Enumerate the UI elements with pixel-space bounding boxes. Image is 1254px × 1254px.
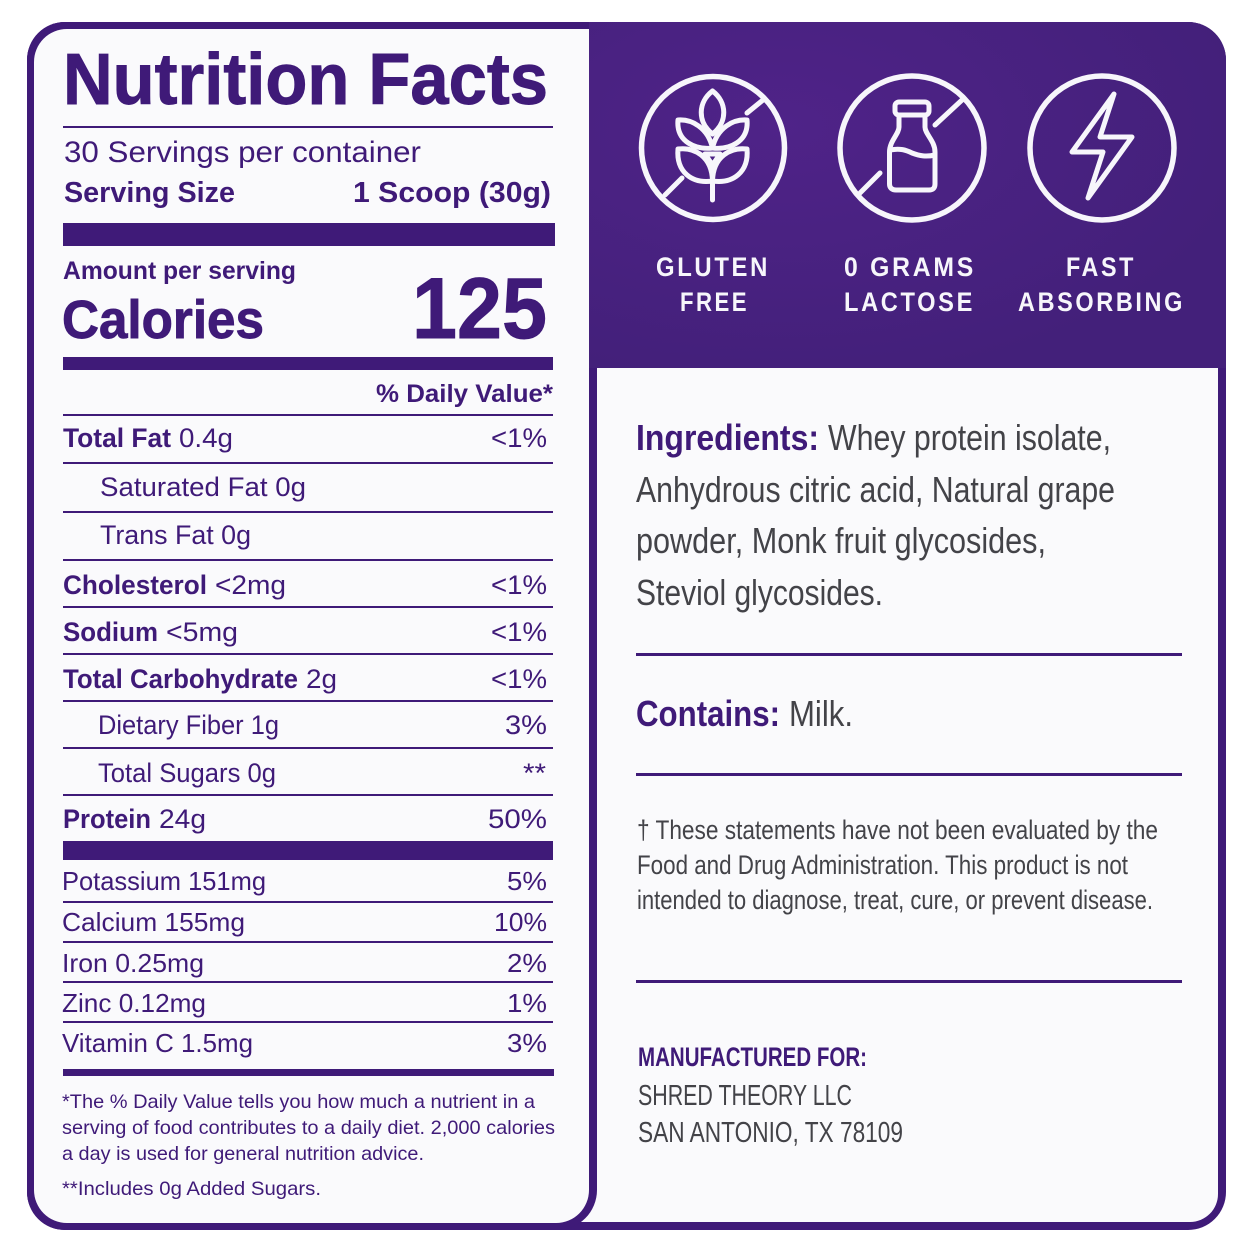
contains: Contains: — [636, 693, 780, 734]
daily value heading: % Daily Value* — [376, 380, 553, 408]
vitamins and minerals: 2% — [507, 948, 547, 978]
label: gluten free: GLUTEN — [656, 252, 770, 282]
nutrient rows: 2g — [306, 664, 337, 694]
nutrient rows: 24g — [159, 804, 206, 834]
nutrient rows: Sodium — [63, 617, 158, 647]
calories: Calories — [62, 290, 264, 350]
nutrient rows: 0.4g — [179, 423, 233, 453]
servings — [64, 136, 551, 209]
nutrient rows: <1% — [491, 617, 547, 647]
vitamins and minerals: Vitamin C 1.5mg — [62, 1028, 253, 1058]
disclaimer: Food and Drug Administration. This product is not — [637, 850, 1128, 880]
nutrient rows: <1% — [491, 570, 547, 600]
vitamins and minerals: Calcium 155mg — [62, 907, 245, 937]
nutrient rows: Protein — [63, 804, 151, 834]
panel: benefits header — [589, 22, 1226, 368]
manufacturer: SHRED THEORY LLC — [638, 1080, 852, 1112]
icon: lightning bolt — [1030, 76, 1174, 220]
manufacturer — [638, 1042, 903, 1149]
disclaimer: † These statements have not been evaluated by the — [637, 815, 1158, 845]
label: 0 grams lactose: 0 GRAMS — [844, 252, 976, 282]
nutrient rows: Total Carbohydrate — [63, 664, 298, 694]
ingredients text: Anhydrous citric acid, Natural grape — [636, 469, 1115, 510]
ingredients text: Ingredients: — [636, 417, 819, 458]
vitamins and minerals: Potassium 151mg — [62, 866, 266, 896]
label: gluten free: FREE — [680, 287, 749, 317]
nutrient rows: <1% — [491, 664, 547, 694]
vitamins and minerals: 1% — [507, 988, 547, 1018]
panel: nutrition facts — [27, 22, 597, 1230]
icon: gluten free — [642, 76, 784, 220]
footnotes: a day is used for general nutrition advice. — [62, 1143, 424, 1165]
footnotes: **Includes 0g Added Sugars. — [62, 1178, 321, 1200]
vitamins and minerals: 3% — [507, 1028, 547, 1058]
vitamins and minerals: Zinc 0.12mg — [62, 988, 206, 1018]
disclaimer — [637, 815, 1158, 915]
label: gluten free — [656, 252, 770, 317]
manufacturer: MANUFACTURED FOR: — [638, 1042, 867, 1072]
servings: 1 Scoop (30g) — [353, 177, 551, 209]
label: fast absorbing: FAST — [1066, 252, 1136, 282]
nutrient rows: <5mg — [166, 617, 238, 647]
servings: Serving Size — [64, 177, 235, 209]
vitamins and minerals: Iron 0.25mg — [62, 948, 204, 978]
nutrient rows: Trans Fat 0g — [100, 520, 251, 550]
title: Nutrition Facts — [63, 40, 548, 120]
nutrient rows: 3% — [505, 710, 547, 740]
calories: Amount per serving — [63, 257, 296, 285]
calories: 125 — [412, 261, 547, 357]
servings: 30 Servings per container — [64, 136, 421, 169]
ingredients text: powder, Monk fruit glycosides, — [636, 520, 1046, 561]
footnotes — [62, 1091, 555, 1200]
nutrient rows: Total Fat — [63, 423, 171, 453]
disclaimer: intended to diagnose, treat, cure, or prevent disease. — [637, 885, 1153, 915]
manufacturer: SAN ANTONIO, TX 78109 — [638, 1117, 903, 1149]
nutrient rows: Dietary Fiber 1g — [98, 710, 279, 740]
footnotes: serving of food contributes to a daily diet. 2,000 calories — [62, 1117, 555, 1139]
label: fast absorbing: ABSORBING — [1018, 287, 1185, 317]
label: fast absorbing — [1018, 252, 1185, 317]
ingredients text — [636, 417, 1115, 613]
panel: ingredients — [560, 368, 1218, 1222]
nutrient rows — [63, 414, 553, 860]
label: 0 grams lactose: LACTOSE — [844, 287, 975, 317]
nutrient rows: Total Sugars 0g — [98, 758, 276, 788]
ingredients text: Whey protein isolate, — [828, 417, 1111, 458]
nutrient rows: <1% — [491, 423, 547, 453]
vitamins and minerals: 10% — [494, 907, 547, 937]
contains: Milk. — [789, 693, 853, 734]
nutrient rows: Cholesterol — [63, 570, 207, 600]
icon: no lactose — [840, 76, 984, 220]
ingredients text: Steviol glycosides. — [636, 572, 883, 613]
nutrient rows: Saturated Fat 0g — [100, 472, 306, 502]
nutrient rows: 50% — [488, 804, 547, 834]
vitamins and minerals — [62, 866, 553, 1058]
label: 0 grams lactose — [844, 252, 976, 317]
calories — [62, 257, 547, 357]
nutrient rows: <2mg — [215, 570, 286, 600]
vitamins and minerals: 5% — [507, 866, 547, 896]
footnotes: *The % Daily Value tells you how much a nutrient in a — [62, 1091, 535, 1113]
nutrient rows: ** — [523, 758, 547, 788]
